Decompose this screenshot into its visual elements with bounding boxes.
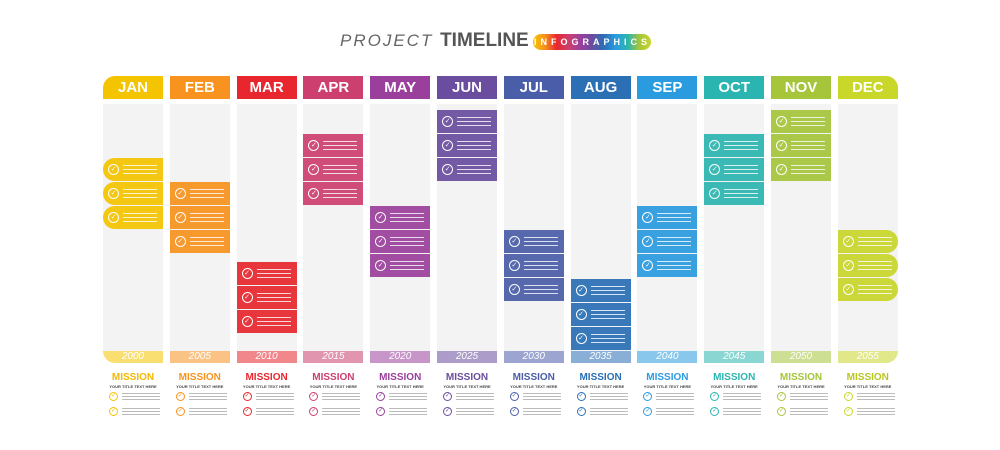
mission: OCT: ✓	[712, 408, 717, 414]
cards: JUL	[504, 230, 564, 301]
cards: MAR: ✓	[244, 270, 250, 277]
column: NOV	[771, 76, 831, 416]
mission: JAN: MISSION	[112, 372, 154, 383]
mission: JUL: MISSION	[513, 372, 555, 383]
column: AUG	[571, 76, 631, 416]
cards: NOV: ✓	[779, 118, 784, 125]
column: SEP	[637, 76, 697, 416]
mission: JAN: YOUR TITLE TEXT HERE	[109, 384, 157, 389]
title	[340, 30, 651, 51]
cards: JUL: ✓	[511, 286, 517, 293]
column: JUL: JUL	[520, 79, 548, 96]
mission: JUL: ✓	[512, 408, 517, 414]
mission: OCT	[710, 372, 761, 416]
mission: SEP	[643, 372, 694, 416]
cards: OCT: ✓	[712, 166, 718, 173]
mission: MAY: YOUR TITLE TEXT HERE	[377, 384, 424, 389]
mission: JAN	[109, 372, 160, 416]
mission: JUL: ✓	[512, 393, 517, 399]
mission: SEP: ✓	[645, 393, 650, 399]
column: JAN: 2000	[122, 351, 144, 362]
mission: JUN: MISSION	[446, 372, 488, 383]
cards: JUN: ✓	[445, 142, 450, 149]
column: JUN: JUN	[452, 79, 482, 96]
cards: MAY	[370, 206, 430, 277]
mission: MAY: MISSION	[379, 372, 421, 383]
mission: SEP: ✓	[645, 408, 650, 414]
column: MAY	[370, 76, 430, 416]
mission: AUG: YOUR TITLE TEXT HERE	[577, 384, 624, 389]
mission: FEB: ✓	[178, 408, 183, 414]
infographics badge	[533, 34, 651, 50]
cards: DEC: ✓	[845, 286, 851, 293]
column: JUL	[504, 76, 564, 416]
mission: AUG	[577, 372, 628, 416]
column: FEB	[170, 76, 230, 416]
cards: MAR: ✓	[244, 294, 250, 301]
cards: MAY: ✓	[378, 238, 384, 245]
column: AUG: 2035	[589, 351, 612, 362]
column: APR: APR	[318, 79, 349, 96]
mission: JUL: YOUR TITLE TEXT HERE	[510, 384, 557, 389]
mission: FEB	[176, 372, 227, 416]
cards: APR: ✓	[311, 142, 317, 149]
mission: OCT: MISSION	[713, 372, 755, 383]
column: AUG: AUG	[584, 79, 617, 96]
mission: MAY: ✓	[378, 408, 383, 414]
column: FEB: FEB	[185, 79, 215, 96]
cards: NOV: ✓	[779, 142, 784, 149]
mission: AUG: MISSION	[579, 372, 622, 383]
cards: MAR	[237, 262, 297, 333]
cards: NOV	[771, 110, 831, 181]
mission: APR: MISSION	[312, 372, 354, 383]
mission: MAR: ✓	[245, 408, 250, 414]
column: MAR: MAR	[250, 79, 284, 96]
mission: MAY	[376, 372, 427, 416]
column: APR	[303, 76, 363, 416]
mission: SEP: YOUR TITLE TEXT HERE	[644, 384, 691, 389]
column: NOV: 2050	[790, 351, 812, 362]
mission: MAY: ✓	[378, 393, 383, 399]
cards: DEC: ✓	[845, 262, 851, 269]
cards: DEC	[838, 230, 898, 301]
cards: SEP: ✓	[645, 214, 651, 221]
cards: JUL: ✓	[511, 262, 517, 269]
column: OCT	[704, 76, 764, 416]
column: SEP: 2040	[656, 351, 679, 362]
mission: MAR: MISSION	[245, 372, 288, 383]
column: APR: 2015	[322, 351, 345, 362]
cards: FEB	[170, 182, 230, 253]
mission: JUL	[510, 372, 561, 416]
mission: DEC: ✓	[846, 393, 851, 399]
column: MAY: MAY	[384, 79, 416, 96]
cards: JAN: ✓	[111, 214, 116, 221]
cards: SEP: ✓	[645, 238, 651, 245]
mission: AUG: ✓	[579, 393, 584, 399]
column: JAN: JAN	[118, 79, 148, 96]
column: NOV: NOV	[785, 79, 817, 96]
cards: MAY: ✓	[378, 262, 384, 269]
column: OCT: OCT	[718, 79, 750, 96]
mission: APR: ✓	[311, 393, 316, 399]
mission: JUN: YOUR TITLE TEXT HERE	[443, 384, 491, 389]
cards: FEB: ✓	[177, 190, 183, 197]
cards: SEP: ✓	[645, 262, 651, 269]
cards: APR: ✓	[311, 166, 317, 173]
cards: APR: ✓	[311, 190, 317, 197]
mission: NOV: ✓	[779, 393, 784, 399]
cards: JAN: ✓	[111, 190, 116, 197]
title: PROJECT TIMELINE	[340, 30, 529, 51]
column: MAY: 2020	[389, 351, 411, 362]
column: JAN	[103, 76, 163, 416]
mission: JUN: ✓	[445, 408, 450, 414]
column: OCT: 2045	[723, 351, 745, 362]
mission: AUG: ✓	[579, 408, 584, 414]
cards: AUG: ✓	[578, 311, 584, 318]
mission: DEC	[844, 372, 895, 416]
mission: NOV: MISSION	[780, 372, 822, 383]
mission: FEB: MISSION	[179, 372, 221, 383]
cards: AUG: ✓	[578, 287, 584, 294]
mission: MAR: ✓	[245, 393, 250, 399]
column: FEB: 2005	[189, 351, 211, 362]
mission: SEP: MISSION	[646, 372, 688, 383]
cards: AUG	[571, 279, 631, 350]
cards: JAN	[103, 158, 163, 229]
mission: FEB: ✓	[178, 393, 183, 399]
cards: JUN	[437, 110, 497, 181]
column: DEC: DEC	[852, 79, 884, 96]
cards: OCT: ✓	[712, 142, 718, 149]
mission: MAR	[243, 372, 294, 416]
column: MAR: 2010	[255, 351, 278, 362]
mission: DEC: ✓	[846, 408, 851, 414]
mission: OCT: ✓	[712, 393, 717, 399]
column: DEC	[838, 76, 898, 416]
mission: OCT: YOUR TITLE TEXT HERE	[711, 384, 758, 389]
mission: NOV: YOUR TITLE TEXT HERE	[777, 384, 825, 389]
cards: FEB: ✓	[177, 214, 183, 221]
cards: FEB: ✓	[177, 238, 183, 245]
column: JUL: 2030	[523, 351, 545, 362]
cards: JUN: ✓	[445, 118, 450, 125]
cards: OCT: ✓	[712, 190, 718, 197]
column: MAR	[237, 76, 297, 416]
mission: JUN: ✓	[445, 393, 450, 399]
column: JUN	[437, 76, 497, 416]
mission: MAR: YOUR TITLE TEXT HERE	[243, 384, 290, 389]
cards: JAN: ✓	[111, 166, 116, 173]
mission: JUN	[443, 372, 494, 416]
cards: APR	[303, 134, 363, 205]
mission: APR: ✓	[311, 408, 316, 414]
mission: DEC: MISSION	[847, 372, 889, 383]
column: SEP: SEP	[652, 79, 682, 96]
mission: NOV	[777, 372, 828, 416]
cards: MAY: ✓	[378, 214, 384, 221]
cards: OCT	[704, 134, 764, 205]
column: DEC: 2055	[857, 351, 879, 362]
cards: NOV: ✓	[779, 166, 784, 173]
cards: MAR: ✓	[244, 318, 250, 325]
mission: DEC: YOUR TITLE TEXT HERE	[844, 384, 891, 389]
infographics badge: INFOGRAPHICS	[534, 37, 651, 47]
cards: DEC: ✓	[845, 238, 851, 245]
mission: APR: YOUR TITLE TEXT HERE	[310, 384, 357, 389]
mission: FEB: YOUR TITLE TEXT HERE	[176, 384, 223, 389]
cards: JUL: ✓	[511, 238, 517, 245]
cards: JUN: ✓	[445, 166, 450, 173]
column: JUN: 2025	[456, 351, 478, 362]
mission: JAN: ✓	[111, 393, 116, 399]
cards: SEP	[637, 206, 697, 277]
cards: AUG: ✓	[578, 335, 584, 342]
mission: APR	[309, 372, 360, 416]
mission: JAN: ✓	[111, 408, 116, 414]
mission: NOV: ✓	[779, 408, 784, 414]
